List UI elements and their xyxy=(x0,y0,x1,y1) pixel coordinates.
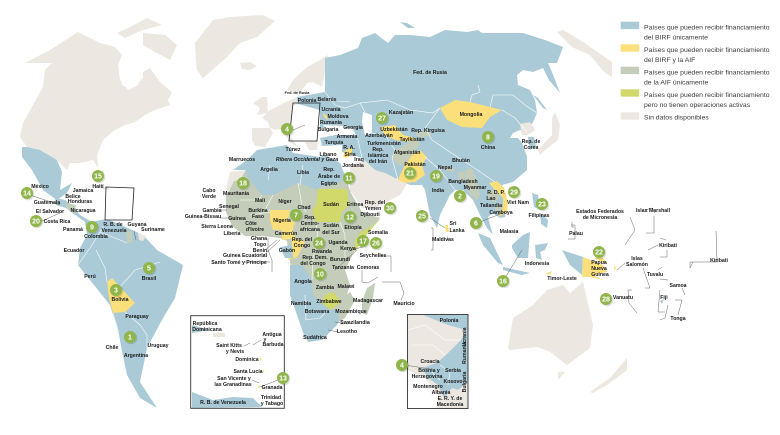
badge 20: 20 xyxy=(32,218,40,226)
badge 14 xyxy=(21,187,34,200)
badge 23: 23 xyxy=(538,202,546,208)
badge 19: 19 xyxy=(432,174,440,180)
country labels: oceania xyxy=(569,208,728,322)
country labels: asia: Lao xyxy=(486,196,496,202)
country labels: asia: Camboya xyxy=(489,210,513,216)
country labels: africa: Angola xyxy=(294,279,312,285)
badge 6 xyxy=(470,217,483,230)
country labels: asia: Lanka xyxy=(450,228,465,234)
southern africa xyxy=(290,265,345,342)
legend item: BIRF and AIF xyxy=(621,44,770,64)
badge 30: 30 xyxy=(386,206,394,212)
country labels: americas: Uruguay xyxy=(147,343,169,349)
asian eligibility overlays xyxy=(323,100,508,232)
country labels: oceania: Tonga xyxy=(670,316,686,322)
country labels: asia: Indonesia xyxy=(525,261,549,267)
country labels: asia: Uzbekistán xyxy=(380,127,408,133)
country labels: americas: Suriname xyxy=(141,227,165,233)
country labels: europe and middle east: Belarús xyxy=(317,97,337,103)
country labels: africa: Santo Tomé y Príncipe xyxy=(211,260,267,266)
africa base: eligible for AIF only xyxy=(226,165,380,312)
badge 18: 18 xyxy=(239,180,247,188)
country labels: oceania: de Micronesia xyxy=(583,215,617,221)
country labels: africa: Benin xyxy=(253,248,267,254)
country labels: oceania: Kiribati xyxy=(710,258,728,264)
country labels: africa: Argelia xyxy=(260,167,278,173)
country labels: europe and middle east: Iraq xyxy=(354,157,364,163)
country labels: oceania: Salomón xyxy=(626,262,648,268)
country labels: oceania: Papua xyxy=(591,260,607,266)
country labels: balkans inset: Croacia xyxy=(420,359,440,365)
country labels: africa: Sudán xyxy=(323,202,339,208)
badge 4 inset: 4 xyxy=(400,362,404,370)
guyana and suriname xyxy=(126,230,132,243)
country labels: africa: Marruecos xyxy=(229,157,255,163)
country labels: africa: Cabo xyxy=(203,188,215,194)
country labels: caribbean inset: R. B. de Venezuela xyxy=(200,400,246,406)
badge 5: 5 xyxy=(147,266,151,272)
badge 21: 21 xyxy=(406,170,414,178)
country labels: balkans inset: Ucrania xyxy=(462,327,468,347)
country labels: caribbean inset: San Vicente y xyxy=(217,376,251,382)
badge 7 xyxy=(290,209,303,222)
country labels: oceania: Nueva xyxy=(591,266,607,272)
badge 29 xyxy=(508,186,521,199)
country labels: asia: Myanmar xyxy=(464,185,486,191)
badge 26: 26 xyxy=(372,240,380,248)
badge 25 xyxy=(416,210,429,223)
country labels: europe and middle east: Bulgaria xyxy=(318,127,338,133)
africa borders xyxy=(240,165,345,320)
badge 24 xyxy=(313,237,326,250)
country labels: africa: Togo xyxy=(254,242,266,248)
country labels: americas: Venezuela xyxy=(101,228,127,234)
country labels: africa: Mauricio xyxy=(393,301,415,307)
mexico and central america xyxy=(22,147,92,222)
country labels: caribbean inset: Santa Lucía xyxy=(233,369,263,375)
somalia and kenya xyxy=(355,218,381,252)
country labels: asia: Rep. Kirguisa xyxy=(411,128,445,134)
country labels: africa: Burundi xyxy=(330,257,350,263)
country labels: oceania: Palau xyxy=(569,231,583,237)
badge 17: 17 xyxy=(359,238,367,246)
country labels: oceania: Fiji xyxy=(660,295,668,301)
country labels: africa: Somalia xyxy=(368,230,388,236)
country labels: americas: Costa Rica xyxy=(44,219,71,225)
country labels: caribbean inset: Dominicana xyxy=(192,327,222,333)
badge 24: 24 xyxy=(315,240,323,248)
badge 3: 3 xyxy=(114,288,118,294)
badge 7: 7 xyxy=(294,212,298,220)
country labels: africa: Tanzania xyxy=(332,265,354,271)
badge 11: 11 xyxy=(345,176,353,182)
country labels: africa: Lesotho xyxy=(337,329,357,335)
legend item: AIF only xyxy=(621,67,770,86)
country labels: europe and middle east: Rep. xyxy=(323,167,335,173)
badge 16 xyxy=(497,275,510,288)
country labels: balkans inset: Montenegro xyxy=(413,384,443,390)
country labels: americas: Guatemala xyxy=(34,200,60,206)
badge 13: 13 xyxy=(279,376,287,382)
legend item: BIRF and AIF: Países que pueden recibir financiamiento xyxy=(644,47,770,54)
country labels: americas: Chile xyxy=(106,345,118,351)
country labels: africa: Sierra Leona xyxy=(201,224,233,230)
country labels: americas: Ecuador xyxy=(64,248,84,254)
islands north of russia xyxy=(400,22,547,150)
country labels: europe and middle east: Turquía xyxy=(325,140,343,146)
country labels: africa: Côte xyxy=(245,221,257,227)
country labels: balkans inset: Bosnia y xyxy=(418,368,440,374)
country labels: asia: Tailandia xyxy=(480,203,502,209)
country labels: africa: Rep. Dem. xyxy=(302,255,328,261)
country labels: africa: Namibia xyxy=(291,301,311,307)
country labels: balkans inset: Kosovo xyxy=(443,379,463,385)
badge 23 xyxy=(536,198,549,211)
country labels: balkans inset: Serbia xyxy=(445,368,461,374)
country labels: caribbean inset: Dominica xyxy=(235,357,259,363)
leader lines and brackets xyxy=(30,125,717,369)
country labels: caribbean inset xyxy=(192,321,284,407)
country labels: africa: Seychelles xyxy=(360,253,387,259)
north america: no data xyxy=(20,15,275,190)
country labels: oceania: Vanuatu xyxy=(613,295,633,301)
country labels: africa: Kenya xyxy=(340,246,356,252)
country labels: europe and middle east: Egipto xyxy=(321,181,337,187)
sudan xyxy=(312,189,349,222)
badge 5 xyxy=(143,262,156,275)
badge 8: 8 xyxy=(486,134,490,142)
country labels: oceania: Estados Federados xyxy=(576,209,624,215)
country labels: europe and middle east: Moldova xyxy=(327,114,349,120)
country labels: africa: Madagascar xyxy=(353,298,383,304)
country labels: africa: Burkina xyxy=(248,208,268,214)
country labels: asia: del Irán xyxy=(369,159,387,165)
numbered badges xyxy=(21,112,613,385)
legend item: BIRF and AIF: del BIRF y la AIF xyxy=(644,57,695,64)
country labels: africa: Sudán xyxy=(323,223,339,229)
inset: balkans xyxy=(407,314,468,409)
country labels: asia: Fed. de Rusia xyxy=(413,70,447,76)
country labels: oceania: Tuvalu xyxy=(647,272,663,278)
country labels: africa: d'Ivoire xyxy=(246,227,264,233)
country labels: americas: El Salvador xyxy=(36,209,64,215)
country labels: africa: Rwanda xyxy=(312,249,332,255)
country labels: africa: Rep. del xyxy=(365,200,386,206)
badge 2 xyxy=(454,190,467,203)
country labels: asia: Bhután xyxy=(452,158,470,164)
badge 10 xyxy=(314,268,327,281)
badge 10: 10 xyxy=(316,272,324,278)
country labels: africa: del Congo xyxy=(300,261,326,267)
badge 26 xyxy=(370,237,383,250)
country labels: americas: Jamaica xyxy=(73,188,93,194)
badge 28 xyxy=(600,293,613,306)
country labels: caribbean inset: Granada xyxy=(261,385,283,391)
country labels: balkans inset: Rumania xyxy=(462,342,468,364)
country labels: africa: Níger xyxy=(278,199,292,205)
world map xyxy=(20,15,664,408)
country labels: africa: africana xyxy=(300,227,320,233)
country labels: caribbean inset: República xyxy=(193,321,218,327)
country labels: africa: Congo xyxy=(294,243,310,249)
hudson bay cutout xyxy=(120,66,143,90)
country labels: asia: Kazajstán xyxy=(389,110,413,116)
country labels: americas: México xyxy=(31,184,49,190)
country labels: americas: Haití xyxy=(92,184,104,190)
country labels: africa xyxy=(185,157,415,341)
country labels: americas: Paraguay xyxy=(125,314,149,320)
badge 1: 1 xyxy=(128,334,132,342)
country labels: europe and middle east: Árabe de xyxy=(318,173,340,180)
legend item: AIF only: Países que pueden recibir financiamiento xyxy=(644,70,770,76)
south america xyxy=(78,219,183,408)
country labels: americas: Colombia xyxy=(84,234,108,240)
country labels: asia: Corea xyxy=(524,145,538,151)
country labels: asia: Maldivas xyxy=(432,237,454,243)
country labels: americas: Guyana xyxy=(127,222,147,228)
country labels: asia: Turkmenistán xyxy=(367,141,401,147)
country labels: africa: Guinea-Bissau xyxy=(185,214,221,220)
legend item: BIRF only xyxy=(621,22,770,42)
country labels: africa: Guinea Ecuatorial xyxy=(223,253,268,259)
country labels: europe and middle east: Polonia xyxy=(298,98,316,104)
country labels: europe and middle east: Rumania xyxy=(320,120,342,126)
country labels: asia: Mongolia xyxy=(460,112,482,118)
country labels: africa: Nigeria xyxy=(273,218,291,224)
country labels: europe and middle east: Túnez xyxy=(286,147,301,153)
country labels: americas: Argentina xyxy=(124,353,148,359)
bolivia xyxy=(107,278,135,313)
country labels: europe and middle east: R. A. xyxy=(343,145,355,151)
country labels: africa: Comoras xyxy=(357,265,379,271)
country labels: americas: Bolivia xyxy=(111,297,129,303)
badge 29: 29 xyxy=(510,190,518,196)
country labels: oceania: Islas Marshall xyxy=(636,208,671,214)
eurasia: eligible for BIRF only xyxy=(297,30,563,235)
badge 15: 15 xyxy=(94,174,102,180)
country labels: asia: Timor-Leste xyxy=(547,276,577,282)
country labels: africa: del Sur xyxy=(322,230,340,236)
legend item: no active operations xyxy=(621,89,770,109)
country labels: asia: India xyxy=(432,188,444,194)
inset box frames on main map xyxy=(105,103,320,220)
country labels: balkans inset: E. R. Y. de xyxy=(438,396,462,402)
badge 21 xyxy=(404,167,417,180)
badge 14: 14 xyxy=(23,190,31,198)
badge 8 xyxy=(482,131,495,144)
badge 18 xyxy=(237,177,250,190)
country labels: europe and middle east: Azerbaiyán xyxy=(365,133,393,139)
country labels: asia: Rep. de xyxy=(522,139,540,145)
country labels: asia: Filipinas xyxy=(528,213,550,219)
badge 12 xyxy=(344,211,357,224)
badge 13 xyxy=(277,372,290,385)
country labels: balkans inset: Bulgaria xyxy=(462,372,468,392)
country labels: oceania: Samoa xyxy=(669,283,687,289)
badge 4 inset xyxy=(396,359,409,372)
country labels: europe and middle east: Fed. de Rusia xyxy=(285,91,310,95)
inland seas xyxy=(323,112,386,168)
badge 16: 16 xyxy=(499,278,507,286)
country labels: asia: Tayikistán xyxy=(400,137,424,143)
country labels: asia: Nepal xyxy=(438,165,453,171)
country labels: europe and middle east: Siria xyxy=(344,152,356,158)
country labels: africa: Sudáfrica xyxy=(303,335,327,341)
country labels: americas: Panamá xyxy=(63,227,83,233)
country labels: africa: Uganda xyxy=(328,240,348,246)
country labels: balkans inset: Macedonia xyxy=(437,402,464,408)
country labels: oceania: Guinea xyxy=(591,272,609,278)
country labels: africa: Botswana xyxy=(305,309,329,315)
badge 19 xyxy=(430,170,443,183)
country labels: africa: Gambia xyxy=(202,208,222,214)
legend item: BIRF only: del BIRF únicamente xyxy=(644,34,708,42)
country labels: africa: Zambia xyxy=(316,285,334,291)
country labels: oceania: Kiribati xyxy=(659,243,677,249)
country labels: africa: Rep. xyxy=(304,215,316,221)
country labels: africa: Chad xyxy=(298,205,310,211)
country labels: caribbean inset: y xyxy=(264,337,267,343)
badge 4 main map xyxy=(281,123,294,136)
country labels: europe and middle east: Ucrania xyxy=(321,107,341,113)
europe and arabia: no data xyxy=(252,55,408,208)
far east russia and japan: no data xyxy=(520,30,612,155)
country labels: americas: Perú xyxy=(84,274,96,280)
country labels: americas: Honduras xyxy=(68,199,92,205)
legend item: no active operations: pero no tienen operaciones activas xyxy=(644,102,751,109)
australia and new zealand: no data xyxy=(508,282,627,393)
badge 22: 22 xyxy=(595,250,603,256)
badge 15 xyxy=(92,170,105,183)
country labels: oceania: Islas xyxy=(631,256,643,262)
badge 27 xyxy=(376,112,389,125)
country labels: caribbean inset: y Tabago xyxy=(261,401,283,407)
badge 12: 12 xyxy=(346,214,354,222)
country labels: africa: Djibouti xyxy=(360,212,380,218)
country labels: africa: Etiopía xyxy=(344,225,362,231)
legend item: AIF only: de la AIF únicamente xyxy=(644,80,708,86)
badge 4 main map: 4 xyxy=(285,126,289,134)
country labels: asia: Sri xyxy=(450,221,457,227)
legend item: BIRF only: Países que pueden recibir financiamiento xyxy=(644,24,770,32)
badge 9: 9 xyxy=(90,224,94,232)
country labels: europe and middle east: Ribera Occidental y Gaza xyxy=(276,157,338,163)
country labels: asia: Pakistán xyxy=(404,162,426,168)
country labels: americas: Nicaragua xyxy=(70,208,96,214)
country labels: americas: Brasil xyxy=(142,276,157,282)
asian borders xyxy=(325,85,537,190)
badge 17 xyxy=(357,235,370,248)
country labels: balkans inset xyxy=(412,318,468,408)
inset: caribbean xyxy=(191,316,284,408)
country labels: americas xyxy=(31,184,169,359)
country labels: europe and middle east: Líbano xyxy=(319,152,337,158)
country labels: caribbean inset: las Granadinas xyxy=(214,382,252,388)
country labels: africa: Verde xyxy=(202,194,216,200)
badge 27: 27 xyxy=(378,116,386,122)
badge 3 xyxy=(110,284,123,297)
badge 28: 28 xyxy=(602,296,610,304)
country labels: africa: Mauritania xyxy=(223,191,249,197)
country labels: africa: Camerún xyxy=(275,231,297,237)
south america borders xyxy=(78,219,160,395)
southeast asia islands xyxy=(447,193,664,304)
country labels: africa: Mozambique xyxy=(335,309,367,315)
country labels: africa: Centro- xyxy=(301,221,319,227)
country labels: asia: Viet Nam xyxy=(507,200,529,206)
badge 22 xyxy=(593,246,606,259)
country labels: africa: Ghana xyxy=(251,236,267,242)
country labels: europe and middle east: Georgia xyxy=(343,125,363,131)
badge 9 xyxy=(86,221,99,234)
badge 11 xyxy=(343,172,356,185)
country labels: asia: Islámica xyxy=(368,153,388,159)
country labels: africa: Guinea xyxy=(228,216,246,222)
country labels: africa: Faso xyxy=(252,214,264,220)
country labels: asia: Bangladesh xyxy=(448,179,478,185)
country labels: africa: Malawi xyxy=(337,284,355,290)
country labels: asia: Rep. xyxy=(372,147,384,153)
badge 30 xyxy=(384,202,397,215)
badge 25: 25 xyxy=(418,214,426,220)
country labels: africa: Libia xyxy=(297,170,309,176)
legend item: no data xyxy=(621,112,709,122)
western sahara xyxy=(227,170,246,195)
country labels: africa: Liberia xyxy=(223,231,241,237)
country labels: balkans inset: Herzegovina xyxy=(412,374,443,380)
country labels: balkans inset: Albania xyxy=(432,390,450,396)
country labels: caribbean inset: Antigua xyxy=(262,332,282,338)
country labels: europe and middle east: Armenia xyxy=(337,134,357,140)
badge 1 xyxy=(124,331,137,344)
legend item: no active operations: Países que pueden recibir financiamiento xyxy=(644,92,770,99)
legend xyxy=(621,22,770,122)
country labels: europe and middle east: Jordania xyxy=(342,163,364,169)
country labels: asia: Afganistán xyxy=(394,150,420,156)
country labels: asia: China xyxy=(481,145,495,151)
country labels: europe and middle east xyxy=(276,91,393,187)
country labels: balkans inset: Polonia xyxy=(440,318,458,324)
legend item: no data: Sin datos disponibles xyxy=(644,114,709,122)
country labels: asia xyxy=(367,70,577,282)
country labels: asia: Malasia xyxy=(500,229,518,235)
country labels: caribbean inset: y Nevis xyxy=(226,349,244,355)
country labels: caribbean inset: Saint Kitts xyxy=(216,343,242,349)
country labels: africa: Malí xyxy=(255,198,266,204)
country labels: africa: Swazilandia xyxy=(340,320,370,326)
country labels: africa: Yemen xyxy=(365,206,381,212)
country labels: africa: Senegal xyxy=(219,204,239,210)
country labels: caribbean inset: Barbuda xyxy=(262,342,284,348)
country labels: africa: Zimbabwe xyxy=(316,299,342,305)
badge 20 xyxy=(30,215,43,228)
country labels: asia: R. D. P. xyxy=(487,190,505,196)
badge 6: 6 xyxy=(474,220,478,228)
badge 2: 2 xyxy=(458,194,462,200)
country labels: africa: Rep. del xyxy=(292,237,313,243)
country labels: americas: R. B. de xyxy=(103,222,123,228)
nigeria, cameroon and congo xyxy=(270,210,305,260)
country labels: africa: Gabón xyxy=(279,248,295,254)
country labels: africa: Eritrea xyxy=(347,202,363,208)
country labels: americas: Belice xyxy=(65,194,81,200)
gabon xyxy=(280,245,293,258)
country labels: caribbean inset: Trinidad xyxy=(261,395,281,401)
africa: north, BIRF only xyxy=(233,145,347,195)
